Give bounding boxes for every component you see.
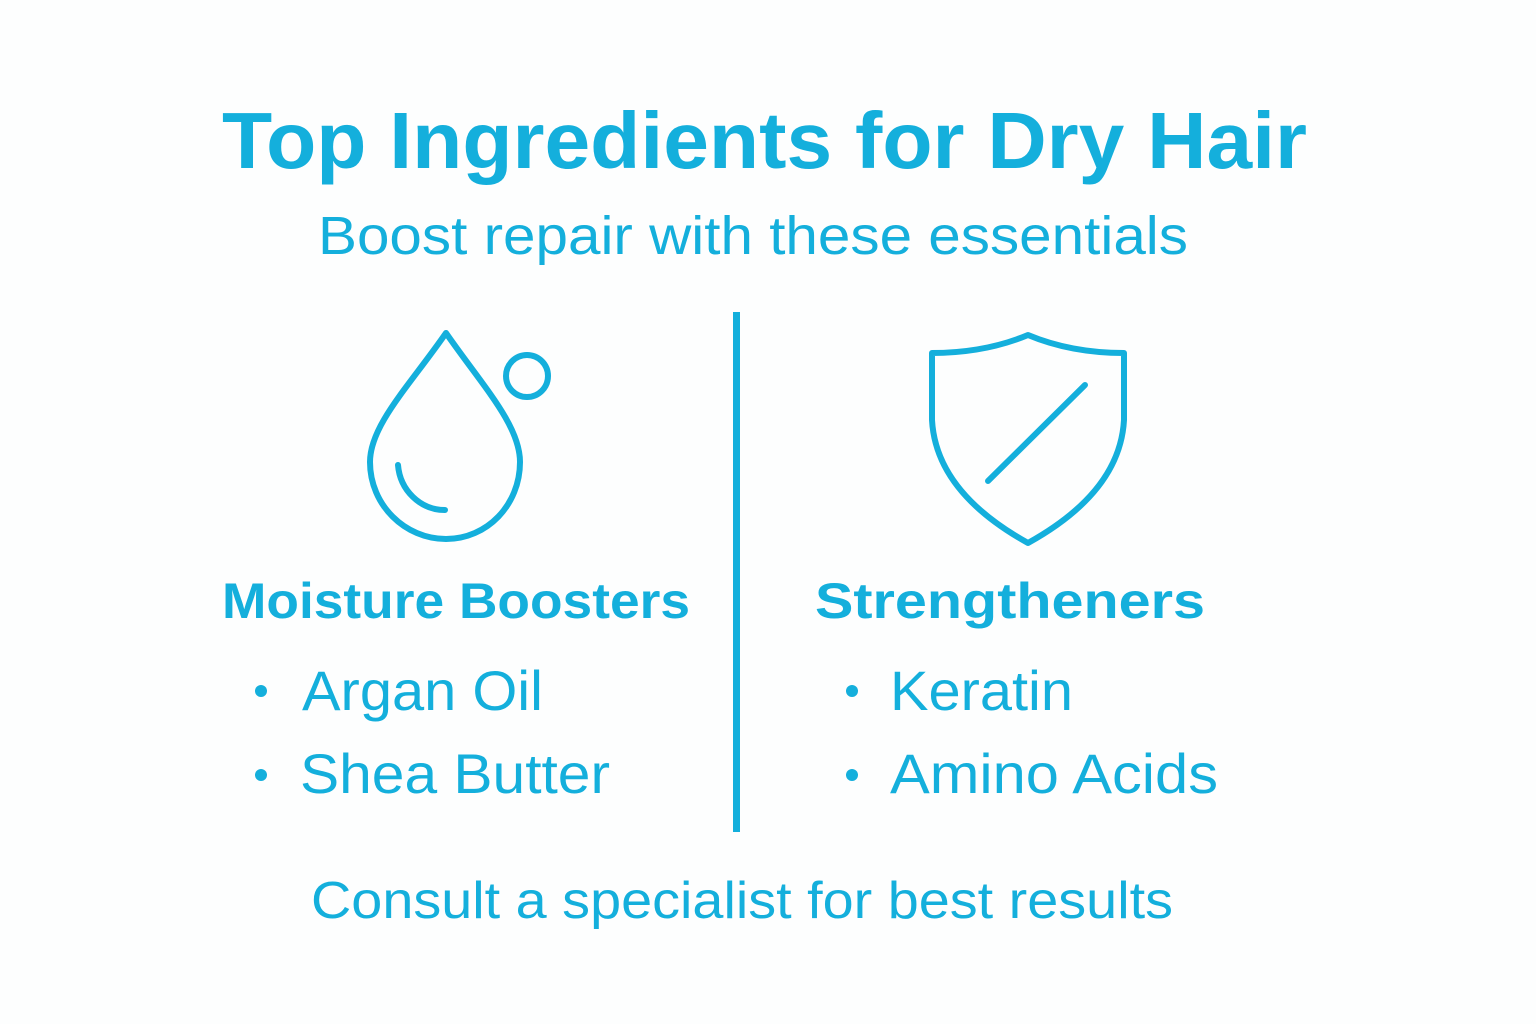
divider — [733, 312, 740, 832]
panel: strengtheners: Strengtheners — [815, 573, 1205, 629]
panel: moisture boosters: Argan Oil — [302, 659, 543, 722]
panel: strengtheners: Keratin — [890, 659, 1073, 722]
icon: water drop — [370, 333, 548, 539]
title: Top Ingredients for Dry Hair — [222, 96, 1307, 185]
panel: moisture boosters — [222, 573, 690, 805]
panel: moisture boosters: Moisture Boosters — [222, 573, 690, 629]
panel: strengtheners — [815, 573, 1218, 805]
panel: strengtheners: Amino Acids — [890, 742, 1218, 805]
subtitle: Boost repair with these essentials — [318, 206, 1188, 266]
footer note: Consult a specialist for best results — [311, 872, 1173, 930]
icon: shield — [932, 335, 1124, 543]
panel: moisture boosters: Shea Butter — [300, 742, 610, 805]
